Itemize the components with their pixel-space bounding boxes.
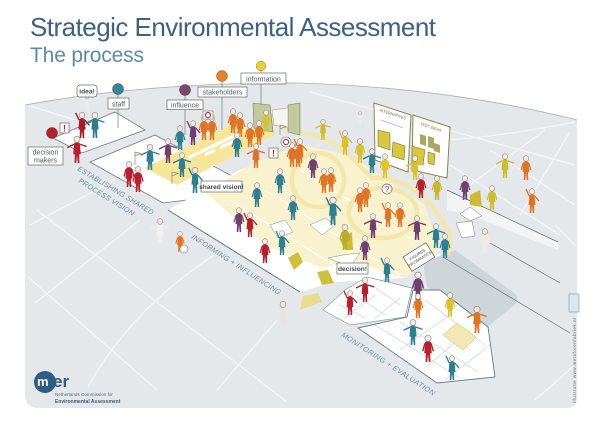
board: alternatives: ALTERNATIVES <box>379 108 407 121</box>
pin: influence: influence <box>171 102 199 110</box>
cream field <box>205 145 440 278</box>
pin: influence <box>167 84 203 135</box>
panel: informing and influencing band <box>168 145 440 292</box>
floor plane <box>25 83 577 408</box>
subtitle: The process <box>30 44 144 67</box>
flags on platform <box>135 125 286 184</box>
board: test ideas: TEST IDEAS <box>420 122 442 133</box>
sign: exclamation: ! <box>63 124 66 134</box>
yellow puzzle pieces <box>443 323 476 350</box>
logo: Netherlands Commission for Environmental Assessment: Netherlands Commission for <box>55 392 113 397</box>
logo: Netherlands Commission for Environmental Assessment: er <box>53 372 69 391</box>
pin: staff <box>108 84 129 128</box>
people: staff and decision makers <box>67 95 104 163</box>
pin: decision makers: decision <box>33 150 58 156</box>
sign: options board <box>403 242 435 272</box>
sign: exclamation <box>60 123 69 134</box>
illustrator credit: illustratie www.metaforenfabriek.nl <box>572 318 577 403</box>
illustrator credit <box>569 294 579 403</box>
pin: information: information <box>246 76 281 83</box>
pin: stakeholders: stakeholders <box>203 90 243 97</box>
sign: question mark <box>382 184 392 194</box>
light path band <box>447 190 558 250</box>
road label: informing and influencing: INFORMING + INFLUENCING <box>190 232 283 297</box>
pin: decision makers <box>28 128 63 165</box>
road label: establishing shared process vision: ESTABLISHING SHARED <box>76 164 156 217</box>
pin: information <box>241 61 286 105</box>
sign: exclamation on field <box>269 148 278 158</box>
sign: no entry near loop <box>281 137 291 147</box>
people: establishing vision group <box>124 109 303 193</box>
information cabinets and desk <box>253 103 300 135</box>
sign: no entry <box>203 111 213 119</box>
title: Strategic Environmental Assessment <box>30 12 437 42</box>
jigsaw pieces <box>270 190 482 310</box>
sign: options board: INFORMATION <box>407 249 433 268</box>
path edge lines <box>443 190 570 333</box>
pin: staff: staff <box>112 101 125 108</box>
speech bubble: idea <box>77 85 97 97</box>
yellow process loops <box>258 118 451 255</box>
people: outside the process <box>151 112 539 327</box>
logo: Netherlands Commission for Environmental Assessment <box>34 371 121 405</box>
grey path shadow <box>423 250 517 327</box>
logo: Netherlands Commission for Environmental Assessment: m <box>37 374 49 389</box>
people: monitoring and decision group <box>344 258 487 380</box>
panel: staff platform <box>53 112 145 153</box>
people: informing field <box>234 119 450 263</box>
sign: exclamation on field: ! <box>272 148 275 158</box>
panel: establishing shared process vision <box>90 125 278 203</box>
callout: shared vision: shared vision! <box>199 184 244 191</box>
callout: decision: decision! <box>338 266 367 273</box>
road label: monitoring and evaluation: MONITORING + EVALUATION <box>340 330 438 398</box>
speech bubble: idea: idea! <box>79 88 95 96</box>
wall boards <box>374 103 450 178</box>
paper flow sheets <box>456 207 482 238</box>
yellow strip <box>145 125 278 185</box>
logo: Netherlands Commission for Environmental Assessment: Environmental Assessment <box>55 399 121 405</box>
panel: monitoring first platform <box>323 277 412 325</box>
road label: establishing shared process vision: PROCESS VISION <box>77 176 137 218</box>
sign: question mark: ? <box>385 185 390 194</box>
panel: monitoring and evaluation platform <box>358 290 495 383</box>
callout: decision <box>337 263 368 274</box>
pin: stakeholders <box>198 70 247 130</box>
sign: options board: FIGURES <box>408 248 427 261</box>
callout: shared vision <box>199 181 244 192</box>
pin: decision makers: makers <box>34 158 57 164</box>
